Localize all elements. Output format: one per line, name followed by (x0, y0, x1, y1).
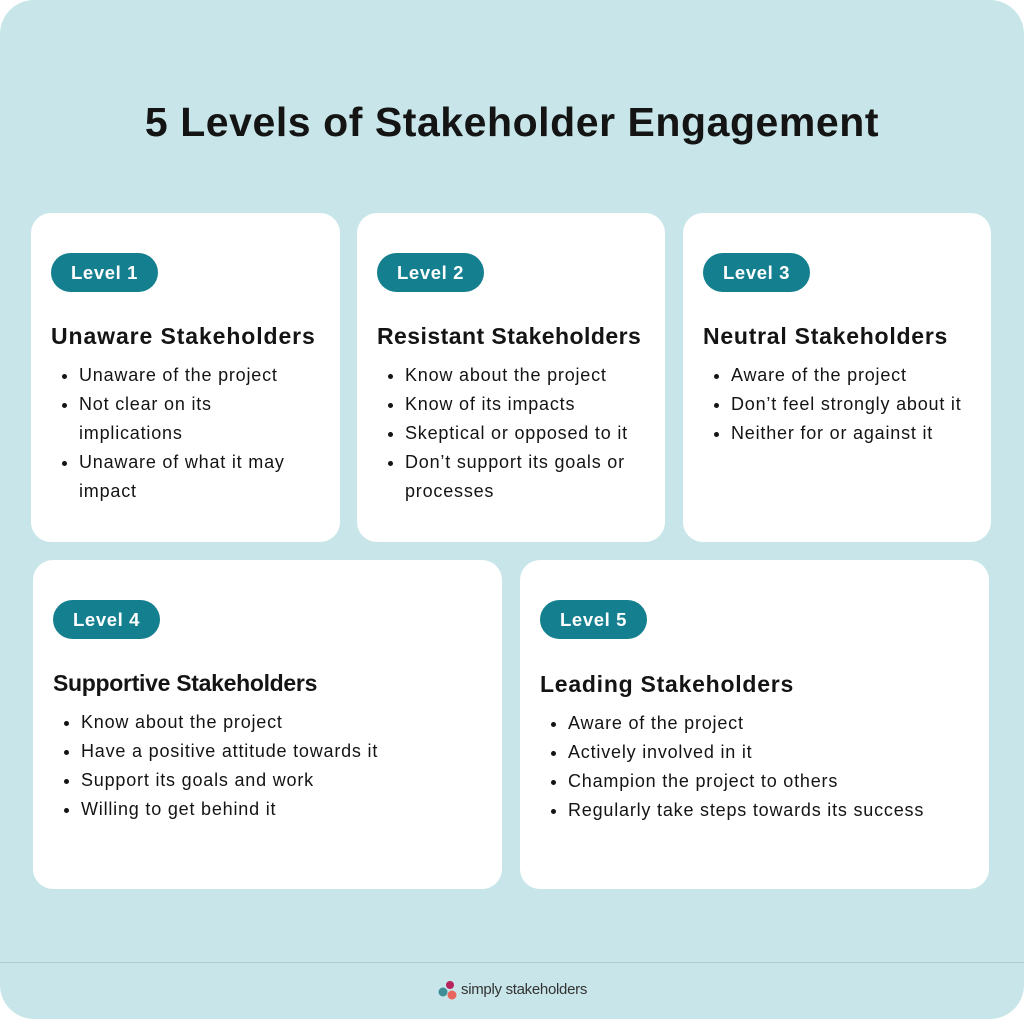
title: 5 Levels of Stakeholder Engagement (145, 99, 879, 145)
bullets: level 1 (62, 365, 285, 501)
bullets: level 2 (388, 365, 628, 501)
badge: level 2 (377, 253, 484, 292)
bullets: level 4: Support its goals and work (81, 770, 314, 790)
heading: resistant: Resistant Stakeholders (377, 323, 641, 349)
heading: leading: Leading Stakeholders (540, 671, 794, 697)
bullets: level 1: Not clear on its (79, 394, 212, 414)
bullets: level 3: Neither for or against it (731, 423, 933, 443)
bullets: level 1: Unaware of what it may (79, 452, 285, 472)
bullets: level 5: Actively involved in it (568, 742, 752, 762)
icon: logo dots (438, 981, 456, 1000)
badge: level 1 (51, 253, 158, 292)
bullets: level 4: Have a positive attitude towards it (81, 741, 378, 761)
bullets: level 2: Skeptical or opposed to it (405, 423, 628, 443)
bullets: level 5: Champion the project to others (568, 771, 838, 791)
bullets: level 3: Don’t feel strongly about it (731, 394, 962, 414)
bullets: level 5: Regularly take steps towards its success (568, 800, 924, 820)
bullets: level 1: Unaware of the project (79, 365, 278, 385)
heading: neutral: Neutral Stakeholders (703, 323, 948, 349)
badge: level 3 (703, 253, 810, 292)
bullets: level 1: implications (79, 423, 183, 443)
bullets: level 2: Know about the project (405, 365, 607, 385)
bullets: level 2: Don’t support its goals or (405, 452, 625, 472)
bullets: level 3: Aware of the project (731, 365, 907, 385)
heading: supportive: Supportive Stakeholders (53, 670, 317, 696)
bullets: level 2: Know of its impacts (405, 394, 575, 414)
badge: level 2: Level 2 (397, 262, 464, 283)
bullets: level 2: processes (405, 481, 494, 501)
bullets: level 5 (551, 713, 924, 820)
bullets: level 5: Aware of the project (568, 713, 744, 733)
heading: unaware: Unaware Stakeholders (51, 323, 316, 349)
panel: level 1 (31, 213, 340, 542)
bullets: level 1: impact (79, 481, 137, 501)
badge: level 5 (540, 600, 647, 639)
panel: level 3 (683, 213, 991, 542)
bullets: level 4 (64, 712, 378, 819)
logo text: simply stakeholders (461, 981, 587, 998)
bullets: level 4: Willing to get behind it (81, 799, 276, 819)
bullets: level 4: Know about the project (81, 712, 283, 732)
badge: level 4 (53, 600, 160, 639)
bullets: level 3 (714, 365, 962, 443)
badge: level 3: Level 3 (723, 262, 790, 283)
panel: level 5 (520, 560, 989, 889)
panel: level 2 (357, 213, 665, 542)
badge: level 1: Level 1 (71, 262, 138, 283)
logo: simply stakeholders (438, 981, 587, 1000)
badge: level 4: Level 4 (73, 609, 140, 630)
panel: level 4 (33, 560, 502, 889)
badge: level 5: Level 5 (560, 609, 627, 630)
